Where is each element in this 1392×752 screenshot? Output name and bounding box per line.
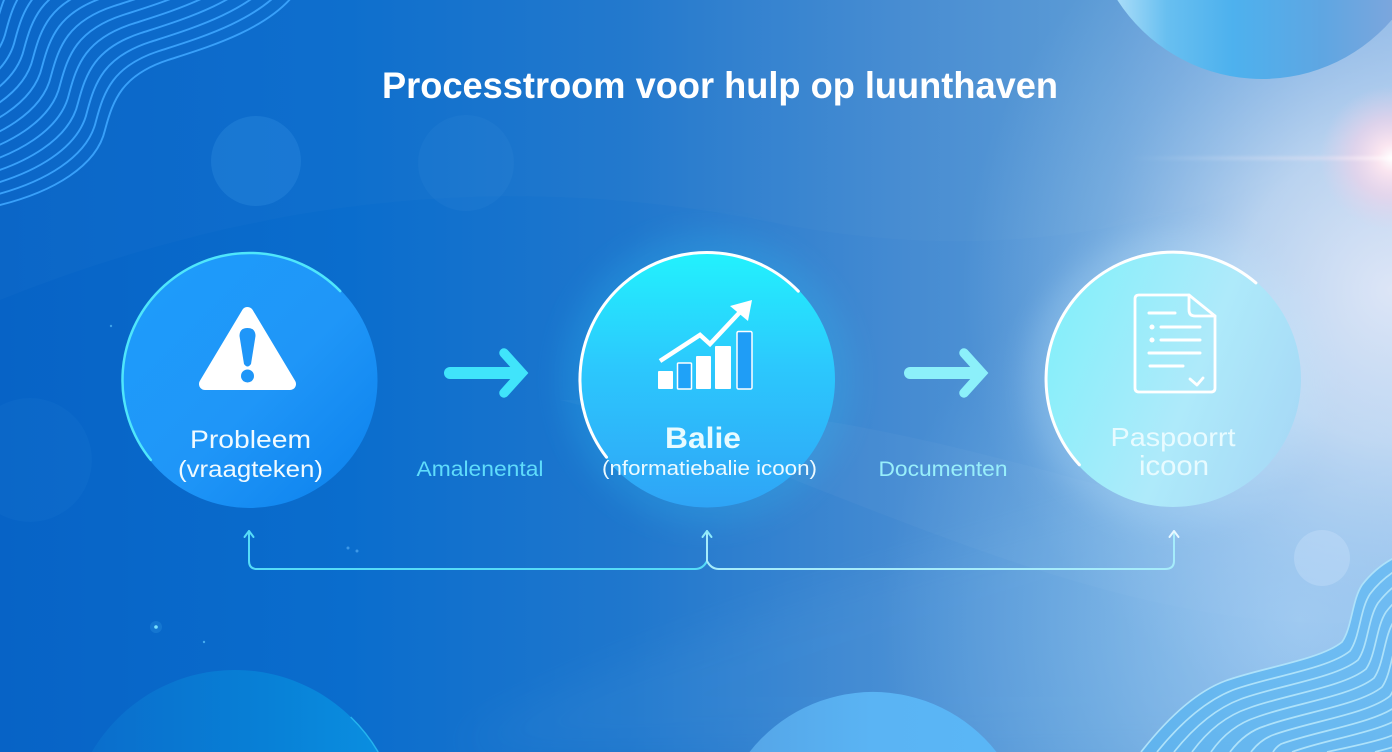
label: icoon: icoon: [1139, 450, 1209, 481]
label: Paspoort: Paspoorrt: [1110, 422, 1236, 452]
label: Probleem: Probleem: [190, 426, 311, 454]
step 1: Probleem: [122, 252, 378, 508]
circle 3: [1027, 233, 1319, 525]
label: Balie: Balie: [665, 422, 741, 455]
connector label: Amalenental: Amalenental: [416, 458, 544, 481]
label: (nformatiebalie icoon): (nformatiebalie icoon): [602, 458, 817, 480]
soft bokeh circles: [0, 115, 1350, 643]
title: Processtroom voor hulp op luunthaven: [382, 65, 1058, 106]
icon: bar chart with arrow: [658, 300, 752, 389]
feedback connector with arrows: [244, 531, 1178, 569]
decorative circle: bottom left: [92, 670, 378, 752]
wave lines: top left: [0, 0, 296, 206]
icon: document: [1135, 295, 1215, 392]
connector label: Documenten: Documenten: [878, 458, 1008, 481]
decorative circle: top right: [1117, 0, 1392, 79]
arrow 1: [450, 353, 522, 393]
circle 2: [561, 233, 853, 525]
circle 1: [122, 252, 378, 508]
step 3: Paspoort: [1027, 233, 1319, 525]
wave lines: bottom right: [1141, 556, 1392, 752]
label: (vraagteken): (vraagteken): [178, 456, 323, 482]
step 2: Balie: [561, 233, 853, 525]
decorative circle: bottom centre: [750, 692, 996, 752]
wave fill: bottom right: [1141, 559, 1392, 752]
arrow 2: [910, 353, 982, 393]
icon: warning triangle: [205, 313, 290, 384]
